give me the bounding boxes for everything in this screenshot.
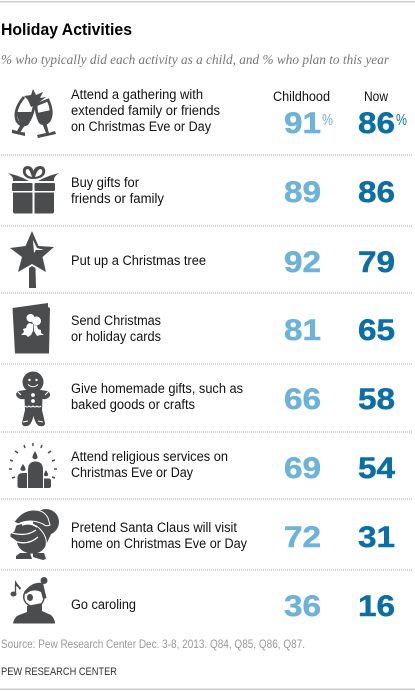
now value: 79 [358, 246, 395, 279]
now value: 58 [358, 383, 395, 416]
childhood value: 92 [284, 246, 321, 279]
activity text: Attend religious services on [71, 449, 228, 465]
icon: caroler with music note [10, 577, 55, 624]
now value: 31 [358, 521, 395, 554]
row 4: cards [12, 303, 395, 354]
childhood value: 69 [284, 452, 321, 485]
childhood value: 36 [284, 590, 321, 623]
activity text: Buy gifts for [71, 175, 139, 191]
icon: champagne glasses [12, 89, 56, 138]
row 2: gifts: friends or family [71, 191, 165, 207]
activity text: Attend a gathering with [71, 87, 203, 103]
row 3: tree [10, 231, 395, 288]
now value: 54 [358, 452, 395, 485]
row 7: Santa: home on Christmas Eve or Day [71, 536, 248, 552]
icon: tree star [10, 231, 54, 288]
now value: 16 [358, 590, 395, 623]
organization credit: PEW RESEARCH CENTER [1, 666, 117, 678]
icon: holiday card [12, 303, 50, 354]
row 4: cards: or holiday cards [71, 329, 161, 345]
activity text: Pretend Santa Claus will visit [71, 520, 237, 536]
row 1: gathering: on Christmas Eve or Day [71, 119, 212, 135]
childhood value: 89 [284, 176, 321, 209]
title: Holiday Activities [1, 21, 132, 39]
row 6: religious services [9, 443, 395, 488]
subtitle: % who typically did each activity as a child, and % who plan to this year [1, 52, 390, 67]
activity text: Put up a Christmas tree [71, 253, 206, 269]
activity text: Go caroling [71, 597, 136, 613]
row 8: caroling [10, 577, 395, 624]
childhood value: 66 [284, 383, 321, 416]
row 7: Santa [10, 509, 395, 560]
now value: 65 [358, 314, 395, 347]
column header: Childhood: Childhood [273, 89, 330, 105]
childhood value: 91 [284, 107, 321, 140]
row 1: gathering: extended family or friends [71, 103, 220, 119]
activity text: Send Christmas [71, 313, 161, 329]
now value: 86 [358, 176, 395, 209]
icon: candles [9, 443, 57, 488]
row 5: gingerbread: baked goods or crafts [71, 397, 195, 413]
column header: Now: Now [364, 89, 389, 105]
icon: Santa with sack [10, 509, 59, 560]
source note: Source: Pew Research Center Dec. 3-8, 2013. Q84, Q85, Q86, Q87. [1, 637, 305, 651]
row 5: gingerbread [16, 372, 395, 426]
childhood value: 72 [284, 521, 321, 554]
row 1: gathering: % [396, 112, 407, 129]
row 1: gathering [12, 87, 407, 140]
childhood value: 81 [284, 314, 321, 347]
now value: 86 [358, 107, 395, 140]
row 2: gifts [8, 166, 395, 214]
row 1: gathering: % [322, 112, 333, 129]
icon: gift box [8, 166, 59, 214]
row 6: religious services: Christmas Eve or Day [71, 465, 194, 481]
icon: gingerbread man [16, 372, 50, 426]
activity text: Give homemade gifts, such as [71, 381, 243, 397]
